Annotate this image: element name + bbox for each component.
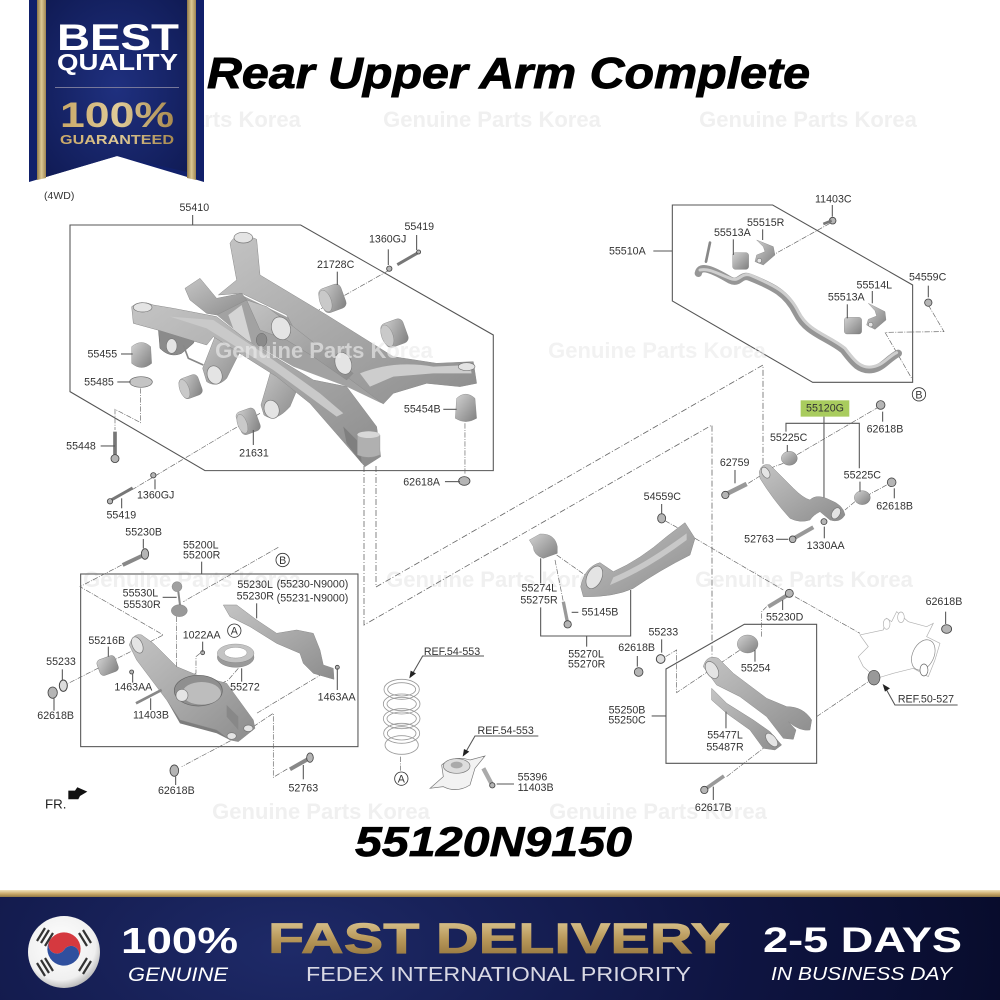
- badge headline: QUALITY: [57, 49, 178, 75]
- callout B: B: [915, 389, 923, 401]
- subframe part numbers: 55485: [84, 377, 114, 389]
- spring reference labels: [409, 646, 554, 794]
- trailing arm part numbers: 55275R: [520, 594, 558, 606]
- lower arm part numbers: 1463AA: [114, 682, 153, 694]
- bump stop: [430, 756, 495, 790]
- lower arm part numbers: 55216B: [88, 635, 125, 647]
- callout A: [228, 624, 241, 638]
- trailing arm part numbers: REF.50-527: [898, 693, 954, 705]
- trailing arm part numbers: 55250B: [609, 704, 645, 716]
- spring seat 55272: [217, 644, 254, 667]
- lower arm 55250: [702, 657, 812, 739]
- front direction arrow: FR.: [45, 797, 66, 812]
- stabilizer part numbers: 55513A: [828, 292, 866, 304]
- badge: best quality ribbon: [29, 0, 204, 182]
- lower arm part numbers: 1463AA: [318, 692, 356, 704]
- lower arm part numbers: 55230R: [237, 590, 274, 602]
- callout B: B: [279, 555, 286, 567]
- watermarks over the subframe row: Genuine Parts Korea: [548, 338, 767, 363]
- genuine claim: 100%: [121, 920, 238, 961]
- watermarks behind content: Genuine Parts Korea: [699, 107, 918, 132]
- lower arm part numbers: (55231-N9000): [277, 592, 348, 604]
- highlighted part number: 55120G: [806, 403, 844, 415]
- lower arm part numbers: 11403B: [133, 709, 169, 721]
- badge guarantee: [60, 96, 174, 147]
- spring reference labels: REF.54-553: [478, 725, 534, 737]
- stabilizer link 55530: [171, 582, 187, 617]
- lower arm part numbers: 62618B: [37, 710, 74, 722]
- trailing arm part numbers: 62618B: [926, 596, 962, 608]
- trailing arm 55270: [581, 523, 695, 597]
- lower arm part numbers: 55230B: [125, 526, 162, 538]
- stabilizer part numbers: 55514L: [857, 279, 892, 291]
- highlighted part number: [801, 400, 849, 417]
- upper arm part numbers: [720, 412, 913, 552]
- bushing 55274L: [529, 534, 557, 558]
- panel: lower control arm 55200L: [37, 526, 358, 812]
- callout A: [395, 772, 408, 786]
- watermarks behind content: Genuine Parts Korea: [83, 107, 302, 132]
- lower arm part numbers: 55272: [230, 682, 260, 694]
- variant note: 4WD: (4WD): [44, 190, 74, 202]
- trailing arm part numbers: 55254: [741, 663, 771, 675]
- trailing arm part numbers: 62618B: [618, 642, 655, 654]
- badge guarantee: GUARANTEED: [60, 132, 174, 147]
- arm bushings and fasteners: [722, 401, 896, 543]
- panel: stabilizer bar 55510A: [609, 194, 947, 401]
- trailing arm part numbers: 55270L: [568, 649, 604, 661]
- title: Rear Upper Arm Complete: [207, 49, 810, 98]
- bolts and nuts: [107, 250, 470, 504]
- lower arm part numbers: 62618B: [158, 785, 195, 797]
- front direction arrow: [45, 787, 87, 812]
- subframe part numbers: 55419: [404, 221, 434, 233]
- watermarks behind content: Genuine Parts Korea: [212, 799, 431, 824]
- trailing arm part numbers: 55145B: [582, 607, 618, 619]
- upper arm part numbers: 55225C: [844, 470, 881, 482]
- stabilizer part numbers: 55515R: [747, 217, 785, 229]
- callout B: [912, 388, 926, 401]
- watermarks behind content: Genuine Parts Korea: [549, 799, 768, 824]
- trailing arm part numbers: 55230D: [766, 611, 804, 623]
- subframe part numbers: [66, 202, 460, 521]
- lower arm part numbers: 55233: [46, 656, 76, 668]
- genuine claim: [121, 920, 238, 986]
- watermarks over the subframe row: Genuine Parts Korea: [215, 338, 434, 363]
- genuine claim: GENUINE: [128, 965, 228, 986]
- trailing arm part numbers: 55274L: [522, 583, 557, 595]
- watermarks behind content: Genuine Parts Korea: [83, 567, 302, 592]
- delivery time: 2-5 DAYS: [763, 921, 962, 960]
- bushing and fasteners: [563, 514, 952, 794]
- subframe part numbers: 1360GJ: [137, 490, 174, 502]
- lower arm shape: [129, 635, 255, 742]
- delivery time: [763, 921, 962, 984]
- subframe part numbers: 21728C: [317, 259, 355, 271]
- trailing arm part numbers: 55250C: [608, 714, 646, 726]
- lower arm part numbers: (55230-N9000): [277, 579, 348, 591]
- upper arm part numbers: 62618B: [867, 423, 903, 435]
- knuckle outline: [858, 612, 940, 685]
- upper arm part numbers: 62759: [720, 457, 750, 469]
- lower arm part numbers: 55530L: [123, 587, 158, 599]
- lower arm part numbers: 52763: [288, 783, 318, 795]
- part number heading: 55120N9150: [355, 818, 632, 865]
- panel: coil spring and bump stop: [383, 646, 554, 794]
- clamps and bushes: [733, 217, 932, 334]
- trailing arm part numbers: 62617B: [695, 802, 732, 814]
- upper arm part numbers: 62618B: [876, 500, 913, 512]
- spring reference labels: REF.54-553: [424, 646, 480, 658]
- trailing arm part numbers: 55487R: [706, 742, 744, 754]
- lower arm part numbers: 55200L: [183, 540, 219, 552]
- trailing arm part numbers: 55477L: [707, 730, 743, 742]
- callout B: [276, 553, 289, 567]
- badge guarantee: 100%: [60, 96, 174, 135]
- panel: rear upper arm 55120G: [720, 400, 913, 552]
- subframe part numbers: 62618A: [403, 477, 441, 489]
- upper arm part numbers: 55225C: [770, 432, 808, 444]
- spring reference labels: 11403B: [518, 782, 554, 794]
- watermarks behind content: Genuine Parts Korea: [386, 567, 605, 592]
- lower arm part numbers: 55200R: [183, 550, 221, 562]
- panel: rear subframe 55410: [66, 202, 493, 521]
- cover 55477L: [712, 688, 782, 750]
- upper arm part numbers: 52763: [744, 534, 774, 546]
- upper arm shape: [759, 464, 845, 521]
- subframe part numbers: 55454B: [404, 404, 441, 416]
- badge headline: [57, 17, 179, 75]
- delivery time: IN BUSINESS DAY: [771, 963, 954, 984]
- callout A: A: [231, 626, 239, 638]
- stabilizer part numbers: 11403C: [815, 194, 852, 206]
- lower arm part numbers: [37, 526, 356, 797]
- upper arm part numbers: 1330AA: [807, 540, 845, 552]
- long dashed connector lines: [364, 365, 763, 657]
- trailing arm part numbers: [520, 491, 962, 814]
- watermarks over the subframe row: [215, 338, 767, 363]
- badge headline: BEST: [57, 17, 179, 58]
- trailing arm part numbers: 55270R: [568, 659, 606, 671]
- panel: trailing arm and knuckle: [520, 491, 962, 814]
- fast delivery headline: FAST DELIVERY: [268, 915, 730, 963]
- subframe part numbers: 21631: [239, 448, 269, 460]
- stabilizer part numbers: 54559C: [909, 272, 947, 284]
- subframe body: [132, 232, 477, 467]
- bracket 55230L: [223, 605, 334, 679]
- subframe part numbers: 55448: [66, 440, 96, 452]
- stabilizer bar: [698, 243, 898, 370]
- fast delivery headline: FEDEX INTERNATIONAL PRIORITY: [306, 964, 691, 986]
- lower arm part numbers: 1022AA: [183, 629, 222, 641]
- subframe part numbers: 55455: [88, 348, 117, 360]
- icon: Korean flag: [28, 916, 100, 988]
- bottom delivery banner: [0, 890, 1000, 1000]
- watermarks behind content: [83, 107, 918, 824]
- stabilizer part numbers: 55510A: [609, 245, 647, 257]
- fast delivery headline: [268, 915, 730, 986]
- watermarks behind content: Genuine Parts Korea: [695, 567, 914, 592]
- lower arm part numbers: 55530R: [123, 599, 161, 611]
- subframe part numbers: 55419: [107, 509, 136, 521]
- trailing arm part numbers: 54559C: [644, 491, 681, 503]
- subframe part numbers: 1360GJ: [369, 234, 406, 246]
- spring reference labels: 55396: [518, 772, 547, 784]
- trailing arm part numbers: 55233: [648, 626, 678, 638]
- stabilizer part numbers: [609, 194, 947, 318]
- stabilizer part numbers: 55513A: [714, 227, 752, 239]
- bushings: [130, 283, 477, 436]
- lower arm part numbers: 55230L: [237, 579, 273, 591]
- subframe part numbers: 55410: [179, 202, 209, 214]
- bushing and fasteners: [48, 549, 339, 776]
- coil spring: [383, 679, 420, 771]
- watermarks behind content: Genuine Parts Korea: [383, 107, 602, 132]
- callout A: A: [398, 774, 406, 786]
